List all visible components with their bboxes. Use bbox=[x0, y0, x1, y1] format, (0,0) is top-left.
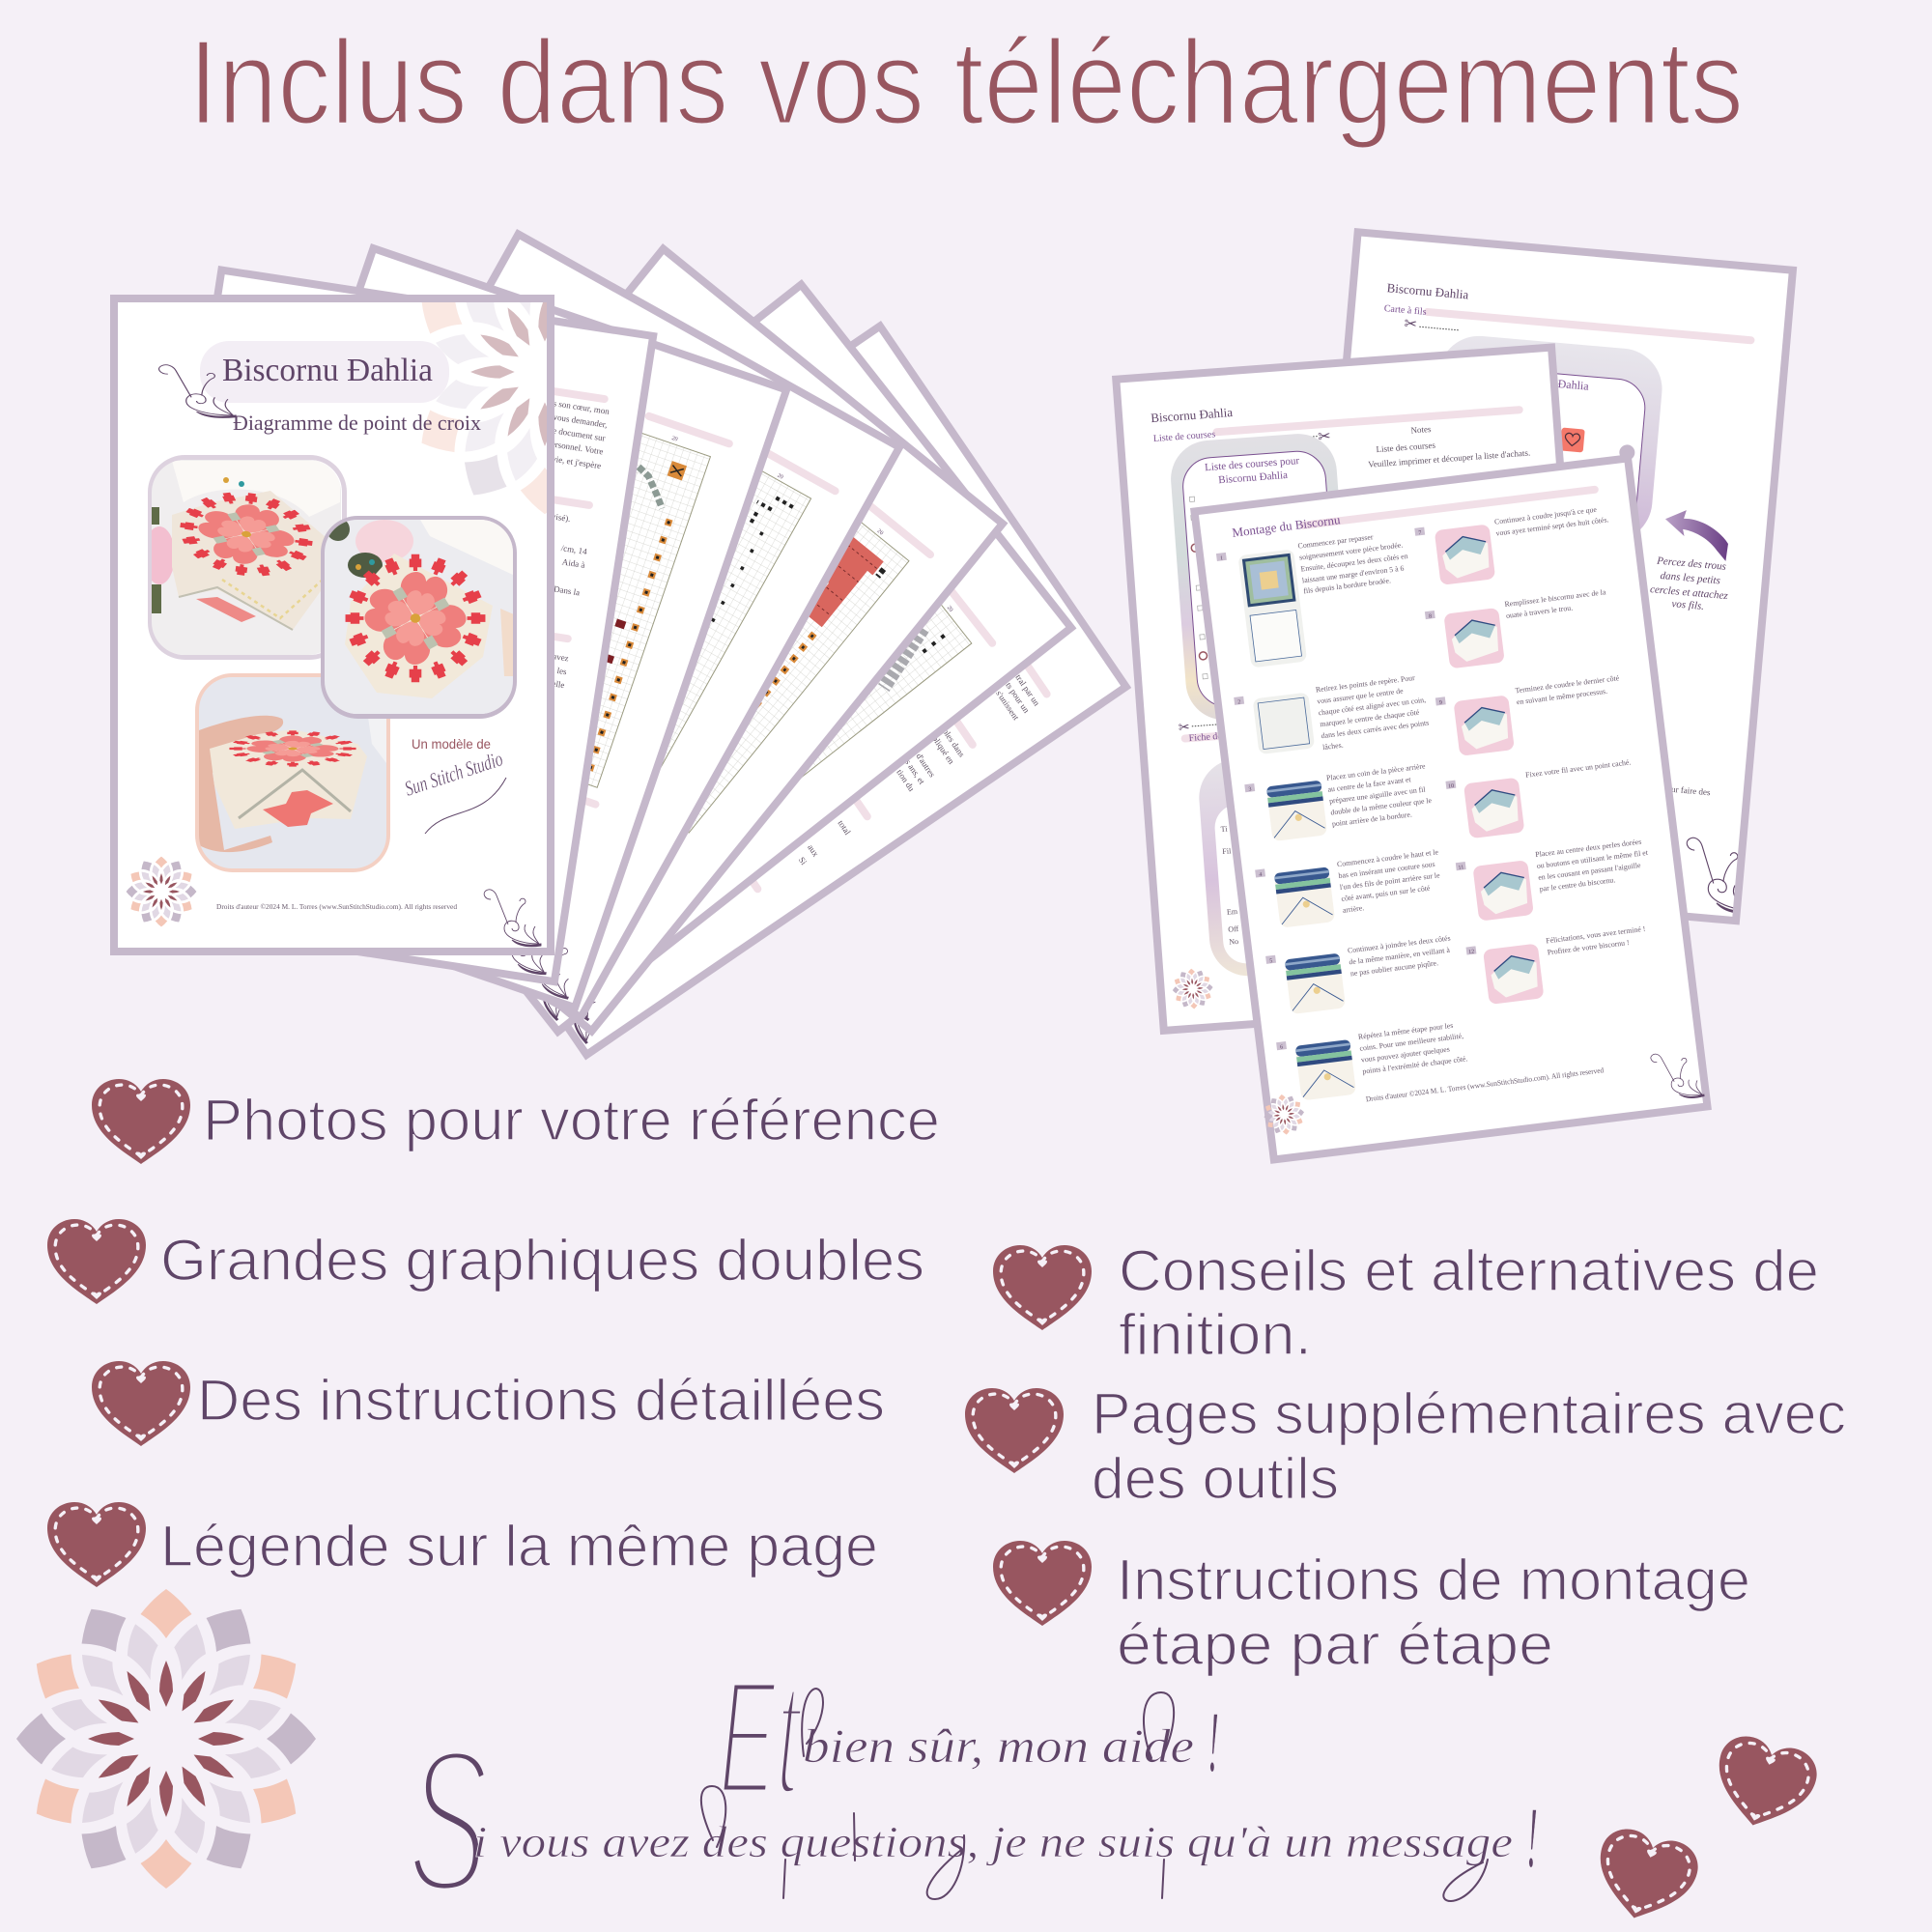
cover: subtitle: Ðiagramme de point de croix bbox=[233, 411, 481, 435]
thread sheet card: Em bbox=[1227, 907, 1238, 917]
section label lower: Fiche de bbox=[1188, 731, 1223, 744]
page: chart with orange stitches: 20 bbox=[670, 436, 678, 443]
handwritten note: cercles et attachez bbox=[1650, 583, 1729, 602]
step 6: points à l'extrémité de chaque côté. bbox=[1362, 1054, 1468, 1076]
page: introduction text page: /cm, 14 bbox=[560, 543, 588, 556]
cover: small mandala bbox=[127, 857, 196, 926]
page: text page at back of fan: de points pour un bbox=[989, 659, 1032, 715]
cover: photo bottom bbox=[195, 673, 390, 872]
step 7: vous ayez terminé sept des huit côtés. bbox=[1495, 515, 1609, 538]
step 12: 12 bbox=[1468, 950, 1475, 955]
step 1: Commencez par repasser bbox=[1297, 532, 1374, 551]
page: text page at back of fan: ensembles dans bbox=[928, 708, 967, 759]
cover: signature bbox=[402, 747, 506, 834]
step 1: Ensuite, découpez les deux côtés en bbox=[1300, 552, 1408, 573]
page heading: Biscornu Ðahlia bbox=[1151, 405, 1234, 425]
step 11: ou boutons en utilisant le même fil et bbox=[1536, 848, 1649, 870]
step 6: vous pouvez ajouter quelques bbox=[1360, 1044, 1450, 1065]
cover: signature: Sun Stitch Studio bbox=[402, 747, 505, 801]
step 1: fils depuis la bordure brodée. bbox=[1303, 576, 1391, 595]
page: chart with grey hearts: 20 bbox=[946, 605, 953, 613]
step 4: 4 bbox=[1259, 872, 1263, 878]
thread sheet card: No bbox=[1229, 937, 1238, 947]
shopping card: Biscornu Ðahlia bbox=[1218, 469, 1288, 486]
shopping card: Liste des courses pour bbox=[1205, 455, 1300, 473]
notes column: Notes bbox=[1410, 424, 1432, 435]
step 6: coins. Pour une meilleure stabilité, bbox=[1359, 1032, 1464, 1053]
page: cover bbox=[114, 298, 551, 952]
script line two: S bbox=[408, 1706, 489, 1932]
feature: extra pages: des outils bbox=[1092, 1446, 1339, 1511]
thread sheet card: Fil bbox=[1222, 846, 1232, 856]
page: text page at back of fan: tion du bbox=[895, 767, 917, 793]
feature: photos bbox=[92, 1079, 940, 1164]
step 4: bas en insérant une couture sous bbox=[1338, 860, 1435, 880]
feature: assembly bbox=[993, 1541, 1750, 1677]
step 1: laissant une marge d'environ 5 à 6 bbox=[1301, 564, 1405, 584]
step 3: préparez une aiguille avec un fil bbox=[1328, 784, 1427, 806]
page: introduction text page: avez bbox=[553, 651, 569, 663]
title: Inclus dans vos téléchargements bbox=[188, 16, 1744, 150]
page: introduction text page: Dans la bbox=[553, 583, 581, 597]
feature: finishing tips bbox=[993, 1238, 1819, 1367]
step 2: dans les deux carrés avec des points bbox=[1321, 719, 1430, 740]
page: chart with grey hearts bbox=[288, 285, 1071, 1032]
thread sheet card: Off bbox=[1228, 924, 1239, 934]
page: introduction text page: personnel. Votre bbox=[547, 439, 604, 456]
script line one: Et bbox=[719, 1646, 804, 1830]
step 2: lâches. bbox=[1322, 741, 1344, 752]
page: text page at back of fan: qui s'unissent bbox=[986, 678, 1021, 723]
step 4: l'un des fils de point arrière sur le bbox=[1339, 870, 1441, 892]
step 9: en suivant le même processus. bbox=[1516, 687, 1608, 706]
step 4: côté avant, puis un sur le côté bbox=[1341, 884, 1431, 903]
step 6: Répétez la même étape pour les bbox=[1357, 1021, 1454, 1041]
feature: legend: Légende sur la même page bbox=[160, 1514, 878, 1578]
step 1: soigneusement votre pièce brodée. bbox=[1299, 540, 1404, 562]
step 6: 6 bbox=[1280, 1044, 1284, 1051]
curved arrow bbox=[1662, 508, 1731, 561]
feature: instructions bbox=[92, 1361, 885, 1446]
feature: extra pages: Pages supplémentaires avec bbox=[1092, 1381, 1846, 1446]
red heart button bbox=[1560, 428, 1585, 453]
page: text page at back of fan: d'un central par un bbox=[998, 649, 1042, 708]
flourish bbox=[1687, 837, 1738, 913]
handwritten note: vos fils. bbox=[1671, 598, 1705, 612]
step 2: 2 bbox=[1237, 699, 1241, 705]
page: text page at back of fan: et d'autres bbox=[909, 745, 938, 780]
notes column: Liste des courses bbox=[1376, 440, 1436, 454]
section label: Carte à fils bbox=[1383, 303, 1427, 318]
fan of pattern pages bbox=[114, 230, 1126, 1055]
page: introduction text page bbox=[123, 270, 653, 981]
heart decoration top bbox=[1705, 1730, 1823, 1838]
step 11: 11 bbox=[1458, 865, 1464, 871]
step 12 bbox=[1465, 924, 1652, 1007]
step 9: Terminez de coudre le dernier côté bbox=[1515, 673, 1620, 695]
page: introduction text page: s bbox=[551, 744, 556, 753]
page: chart with black stitches bbox=[200, 234, 899, 1017]
heading: Montage du Biscornu bbox=[1232, 512, 1342, 540]
handwritten note: Percez des trous bbox=[1656, 555, 1726, 573]
step 4 bbox=[1255, 847, 1446, 930]
cover: photo right bbox=[321, 516, 517, 718]
step 11: en les cousant en passant l'aiguille bbox=[1538, 861, 1641, 882]
shopping card bbox=[1168, 431, 1354, 723]
thread sheet card: Ti bbox=[1220, 824, 1229, 834]
step 8: Remplissez le biscornu avec de la bbox=[1504, 587, 1606, 609]
small mandala bbox=[1171, 967, 1214, 1010]
scissors: ✂ bbox=[1317, 427, 1331, 446]
script line one: bien sûr, mon aide bbox=[803, 1719, 1194, 1773]
scissors bbox=[1281, 427, 1331, 448]
page: introduction text page: (visé). bbox=[548, 511, 571, 524]
step 8: ouate à travers le trou. bbox=[1505, 604, 1574, 620]
scissors lower: ✂ bbox=[1178, 720, 1190, 736]
step 3: au centre de la face avant et bbox=[1327, 775, 1412, 794]
step 11: par le centre du biscornu. bbox=[1539, 875, 1616, 894]
page: introduction text page: elle bbox=[552, 678, 565, 690]
step 9: 9 bbox=[1439, 700, 1442, 706]
body text: pour faire des bbox=[1662, 783, 1711, 797]
step 10 bbox=[1445, 757, 1637, 840]
scissors lower bbox=[1178, 717, 1235, 736]
pink header bar bbox=[1299, 485, 1599, 529]
step 3: 3 bbox=[1248, 786, 1252, 793]
script line two bbox=[408, 1706, 1538, 1932]
cover: title pill bbox=[200, 341, 449, 403]
page: chart with orange stitches bbox=[162, 248, 786, 1008]
step 5: 5 bbox=[1269, 958, 1273, 964]
step 4: Commencez à coudre le haut et le bbox=[1337, 847, 1439, 868]
step 11: Placez au centre deux perles dorées bbox=[1535, 838, 1642, 859]
step 3 bbox=[1244, 761, 1435, 844]
step 2: chaque côté est aligné avec un coin, bbox=[1318, 696, 1426, 717]
feature: assembly: étape par étape bbox=[1117, 1612, 1553, 1677]
step 11 bbox=[1455, 837, 1655, 923]
thread sheet card bbox=[1197, 750, 1380, 979]
pink header bar bbox=[1212, 406, 1523, 436]
step 6 bbox=[1276, 1020, 1470, 1103]
step 1: 1 bbox=[1220, 555, 1223, 562]
step 3: point arrière de la bordure. bbox=[1331, 810, 1412, 828]
thread card frame bbox=[1424, 332, 1665, 566]
scissors: ✂ bbox=[1404, 314, 1418, 333]
step 7: 7 bbox=[1418, 530, 1422, 536]
step 2: Retirez les points de repère. Pour bbox=[1315, 673, 1416, 695]
small mandala bbox=[1262, 1093, 1307, 1137]
step 9 bbox=[1435, 673, 1627, 758]
step 5 bbox=[1265, 934, 1458, 1016]
step 10: Fixez votre fil avec un point caché. bbox=[1525, 757, 1632, 780]
cover: faded mandala bbox=[421, 302, 547, 514]
step 2: marquez le centre de chaque côté bbox=[1320, 708, 1420, 728]
cover: designer credit: Un modèle de bbox=[412, 737, 491, 752]
step 2: vous assurer que le centre de bbox=[1317, 687, 1405, 705]
page heading: Biscornu Ðahlia bbox=[1386, 280, 1469, 302]
step 12: Félicitations, vous avez terminé ! bbox=[1546, 924, 1646, 945]
section label lower bbox=[1180, 727, 1268, 745]
section label: Liste de courses bbox=[1153, 429, 1216, 444]
cover: copyright: Droits d'auteur ©2024 M. L. Torres (www.SunStitchStudio.com). All rights reserved bbox=[216, 903, 458, 911]
flourish bbox=[1650, 1049, 1704, 1102]
mandala bbox=[16, 1589, 316, 1889]
page: introduction text page: vous demander, bbox=[553, 412, 608, 430]
step 5: Continuez à joindre les deux côtés bbox=[1347, 934, 1451, 955]
page: introduction text page: ce document sur bbox=[549, 425, 606, 443]
page: shopping list bbox=[1116, 348, 1600, 1031]
step 8 bbox=[1425, 587, 1613, 671]
copyright: Droits d'auteur ©2024 M. L. Torres (www.SunStitchStudio.com). All rights reserved bbox=[1365, 1065, 1605, 1103]
step 5: ne pas oublier aucune piqûre. bbox=[1350, 958, 1438, 978]
page: chart with red block bbox=[252, 249, 1003, 1031]
step 2 bbox=[1234, 672, 1431, 761]
script flourishes bbox=[701, 1689, 1488, 1901]
page: assembly instructions bbox=[1188, 444, 1715, 1160]
feature: instructions: Des instructions détaillées bbox=[197, 1368, 885, 1433]
heart decoration bottom bbox=[1586, 1823, 1704, 1931]
text: ! bbox=[1526, 1790, 1538, 1886]
feature: legend bbox=[47, 1502, 878, 1587]
cover: corner flourish bbox=[484, 890, 541, 947]
page: text page at back of fan bbox=[341, 327, 1126, 1055]
feature: charts bbox=[47, 1219, 924, 1304]
step 3: Placez un coin de la pièce arrière bbox=[1326, 761, 1426, 782]
page: thread card bbox=[1301, 232, 1808, 923]
cover: title: Biscornu Ðahlia bbox=[222, 353, 433, 388]
page: text page at back of fan: total bbox=[836, 818, 853, 837]
page: introduction text page: Aida à bbox=[561, 556, 585, 570]
step 8: 8 bbox=[1429, 613, 1432, 620]
step 3: double de la même couleur que le bbox=[1330, 796, 1433, 817]
handwritten note: dans les petits bbox=[1660, 570, 1720, 586]
step 7 bbox=[1414, 503, 1614, 587]
page: introduction text page: dans son cœur, mon bbox=[540, 396, 611, 416]
feature: assembly: Instructions de montage bbox=[1117, 1548, 1750, 1612]
step 12: Profitez de votre biscornu ! bbox=[1547, 938, 1630, 956]
step 7: Continuez à coudre jusqu'à ce que bbox=[1494, 505, 1598, 526]
page: introduction text page: les bbox=[556, 666, 568, 676]
notes column: Veuillez imprimer et découper la liste d'achats. bbox=[1368, 448, 1531, 469]
page: chart with red block: 20 bbox=[876, 528, 884, 536]
step 10: 10 bbox=[1448, 783, 1454, 790]
page: chart with black stitches: 20 bbox=[776, 472, 784, 481]
scissors bbox=[1404, 314, 1461, 337]
script line two: i vous avez des questions, je ne suis qu'à un message bbox=[473, 1817, 1513, 1866]
feature: finishing tips: finition. bbox=[1119, 1302, 1312, 1367]
cover: photo left bbox=[144, 455, 345, 659]
page: text page at back of fan: aux bbox=[806, 842, 821, 859]
pink header bar bbox=[1423, 308, 1755, 345]
feature: photos: Photos pour votre référence bbox=[203, 1088, 940, 1152]
feature: charts: Grandes graphiques doubles bbox=[160, 1228, 924, 1293]
step 5: de la même manière, en veillant à bbox=[1349, 946, 1451, 966]
step 1 bbox=[1216, 528, 1419, 670]
step 4: arrière. bbox=[1342, 903, 1365, 915]
script line one bbox=[719, 1646, 1219, 1830]
page: text page at back of fan: des ans, et bbox=[898, 751, 927, 786]
card title: Ðahlia bbox=[1557, 377, 1590, 393]
feature: finishing tips: Conseils et alternatives de bbox=[1119, 1238, 1819, 1303]
feature: extra pages bbox=[965, 1381, 1846, 1511]
cover: flourish bbox=[159, 365, 236, 417]
page: text page at back of fan: appliqué en bbox=[925, 727, 956, 766]
page: introduction text page: vie, et j'espère bbox=[552, 454, 602, 470]
text: ! bbox=[1208, 1694, 1219, 1790]
page: text page at back of fan: Si bbox=[797, 855, 810, 867]
